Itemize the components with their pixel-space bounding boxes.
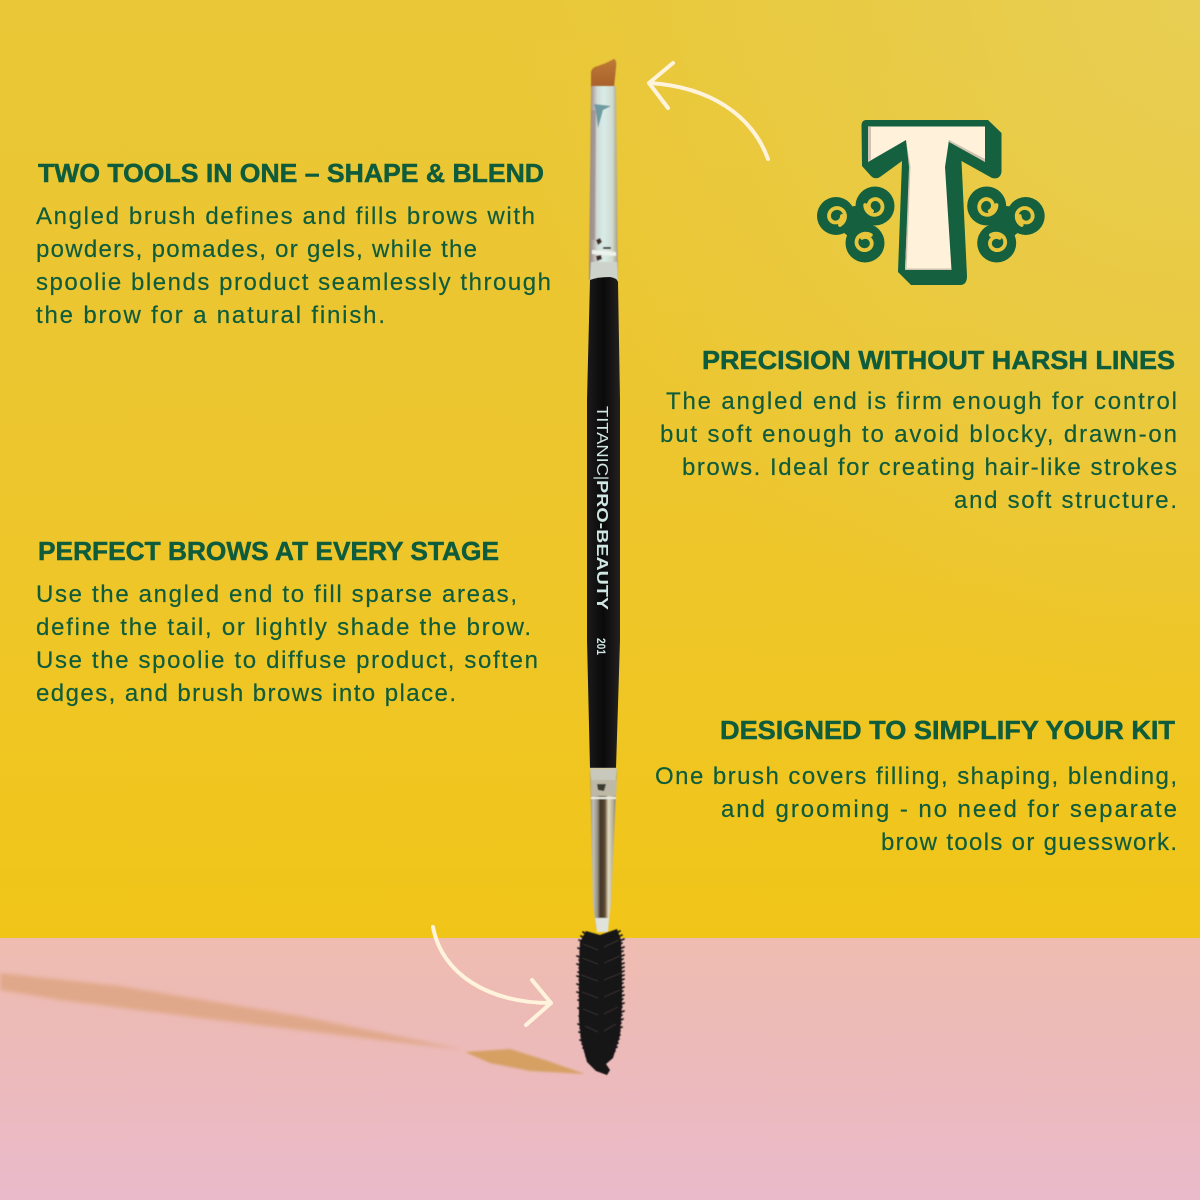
body copy: edges, and brush brows into place. xyxy=(36,680,456,707)
body copy: The angled end is firm enough for control xyxy=(666,388,1177,415)
logo: Titanic T with triskele spirals xyxy=(817,120,1045,285)
body copy xyxy=(36,203,551,329)
black handle xyxy=(587,277,620,768)
handle branding: TITANIC xyxy=(593,406,610,476)
body copy: One brush covers filling, shaping, blending, xyxy=(655,763,1177,790)
body copy xyxy=(655,763,1177,856)
upper metal ferrule xyxy=(589,86,618,280)
product: double-ended brow brush xyxy=(577,59,624,1075)
icon: right triskele xyxy=(967,186,1045,262)
arrow: pointing to angled brush xyxy=(649,63,768,159)
angled brush bristles xyxy=(591,59,616,87)
body copy: powders, pomades, or gels, while the xyxy=(36,236,477,263)
lower metal ferrule xyxy=(590,768,617,932)
text block: two tools in one xyxy=(36,158,551,329)
heading: PRECISION WITHOUT HARSH LINES xyxy=(702,345,1175,375)
body copy: and soft structure. xyxy=(954,487,1177,514)
handle branding: | xyxy=(593,476,610,480)
heading: DESIGNED TO SIMPLIFY YOUR KIT xyxy=(720,715,1175,745)
text block: designed to simplify your kit xyxy=(655,715,1177,856)
body copy: but soft enough to avoid blocky, drawn-on xyxy=(660,421,1177,448)
icon: T letter cream face xyxy=(868,126,985,270)
icon: left triskele xyxy=(817,186,894,262)
T letter inner shading xyxy=(868,127,985,270)
body copy: Use the spoolie to diffuse product, soften xyxy=(36,647,538,674)
handle branding: 201 xyxy=(594,638,608,655)
icon: T letter dark outline xyxy=(862,120,1002,285)
yellow wall background xyxy=(0,0,1200,940)
body copy: define the tail, or lightly shade the brow. xyxy=(36,614,531,641)
body copy xyxy=(660,388,1177,514)
heading: TWO TOOLS IN ONE – SHAPE & BLEND xyxy=(38,158,544,188)
body copy: brows. Ideal for creating hair-like strokes xyxy=(682,454,1177,481)
text block: precision without harsh lines xyxy=(660,345,1177,514)
handle branding xyxy=(593,406,610,655)
handle branding: PRO-BEAUTY xyxy=(593,480,610,611)
pink floor xyxy=(0,938,1200,1200)
body copy: and grooming - no need for separate xyxy=(721,796,1177,823)
body copy: the brow for a natural finish. xyxy=(36,302,385,329)
text block: perfect brows at every stage xyxy=(36,536,538,707)
brush shadow on floor xyxy=(0,973,585,1074)
body copy: brow tools or guesswork. xyxy=(881,829,1177,856)
heading: PERFECT BROWS AT EVERY STAGE xyxy=(38,536,499,566)
arrow: pointing to spoolie xyxy=(433,927,551,1025)
body copy: spoolie blends product seamlessly through xyxy=(36,269,551,296)
body copy: Use the angled end to fill sparse areas, xyxy=(36,581,517,608)
spoolie bristles xyxy=(577,929,624,1075)
body copy: Angled brush defines and fills brows with xyxy=(36,203,535,230)
body copy xyxy=(36,581,538,707)
